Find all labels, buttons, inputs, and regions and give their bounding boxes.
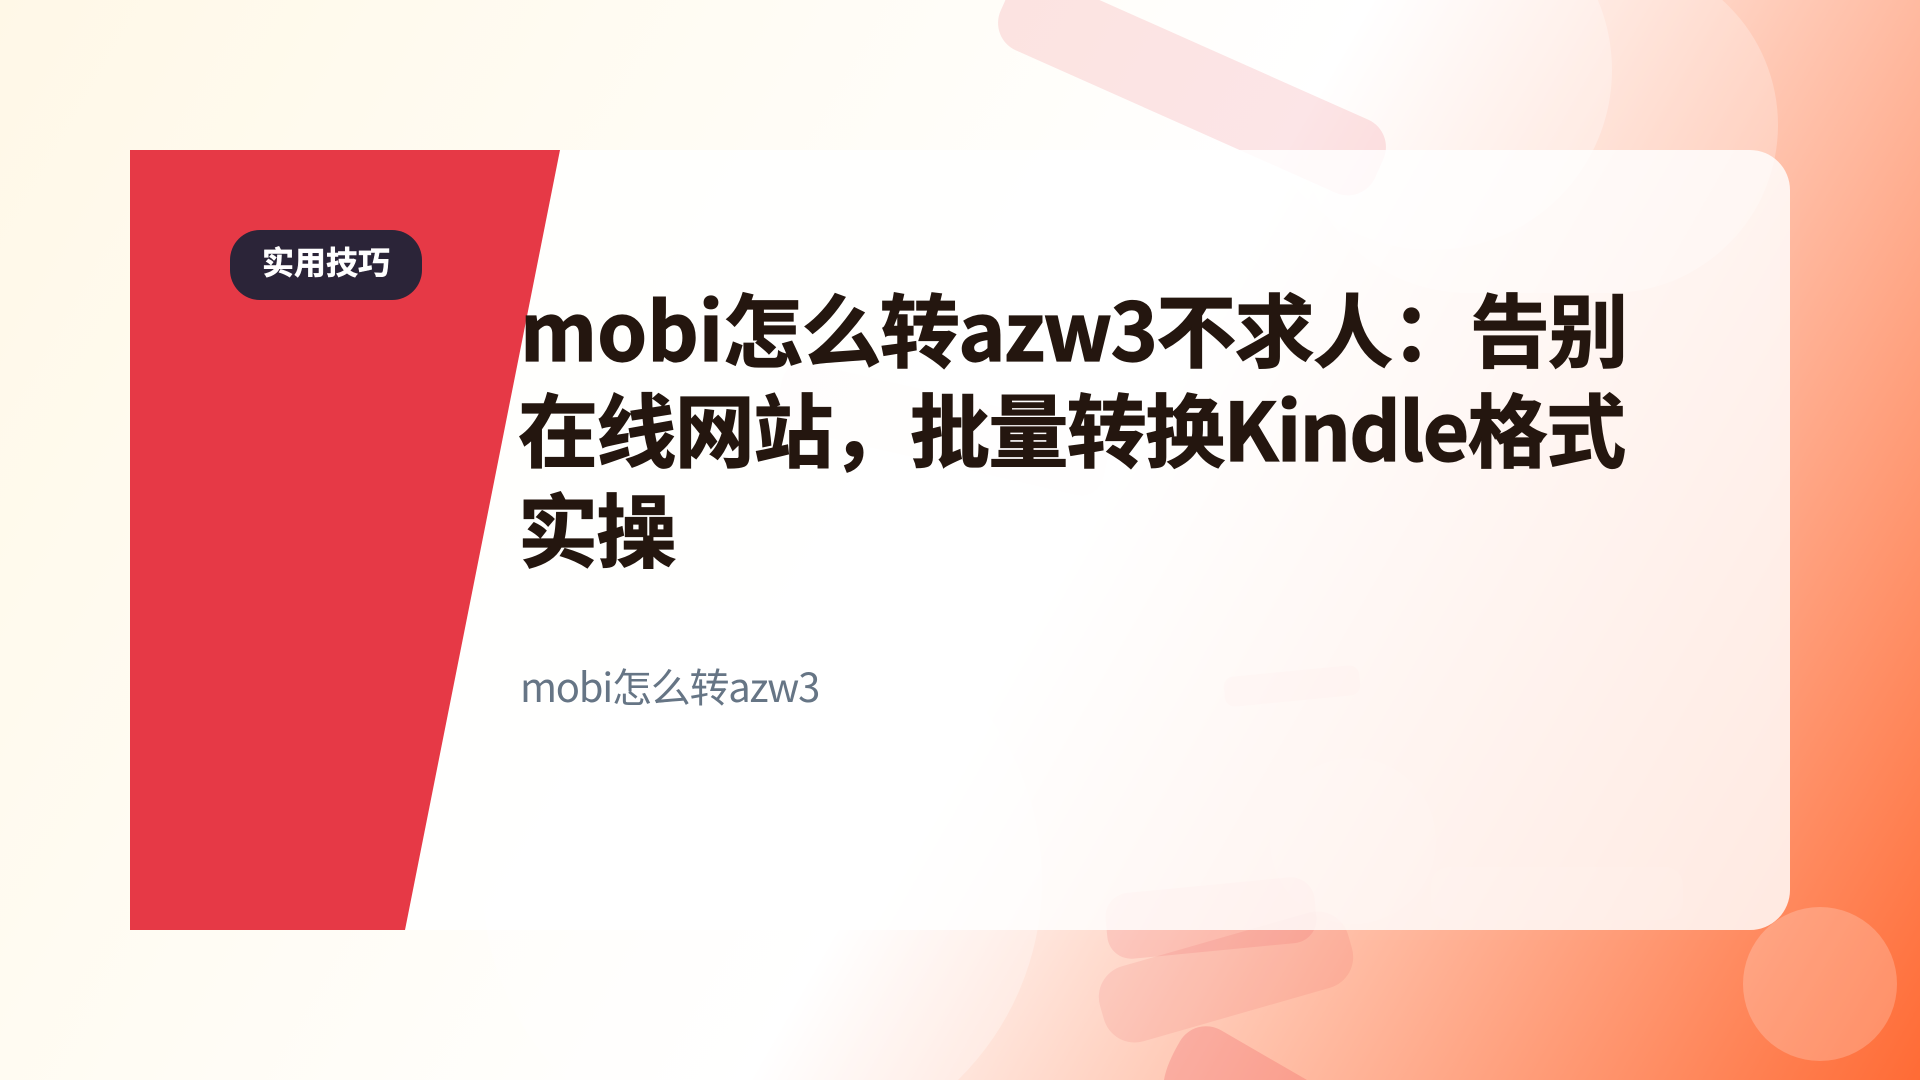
decorative circle: bottom right [1743,907,1897,1061]
decorative circle: top right inner [1503,0,1612,150]
decorative circle: lower card faint [1270,758,1436,924]
decorative shape: top right outer [1560,0,1778,158]
subtitle: mobi怎么转azw3 [520,656,819,714]
title: 在线网站，批量转换Kindle格式 [518,369,1624,485]
panel: red slanted block [130,150,560,930]
main card [130,150,1790,930]
title [518,269,1627,585]
category tag [230,230,422,300]
decorative bar: small behind card [1223,665,1361,707]
decorative bar: lower stacked upper [1103,875,1319,961]
decorative bar: faint behind title [772,358,1113,500]
title: 实操 [518,469,675,585]
decorative circle: bottom centre large [914,930,1037,1080]
title: mobi怎么转azw3不求人：告别 [520,269,1627,385]
decorative bar: bottom edge [1164,1026,1306,1080]
decorative bar: top pink [998,0,1386,150]
decorative bar: faint lower right [1431,867,1683,920]
category tag: 实用技巧 [262,238,390,284]
decorative bar: lower stacked middle [1091,904,1361,1050]
